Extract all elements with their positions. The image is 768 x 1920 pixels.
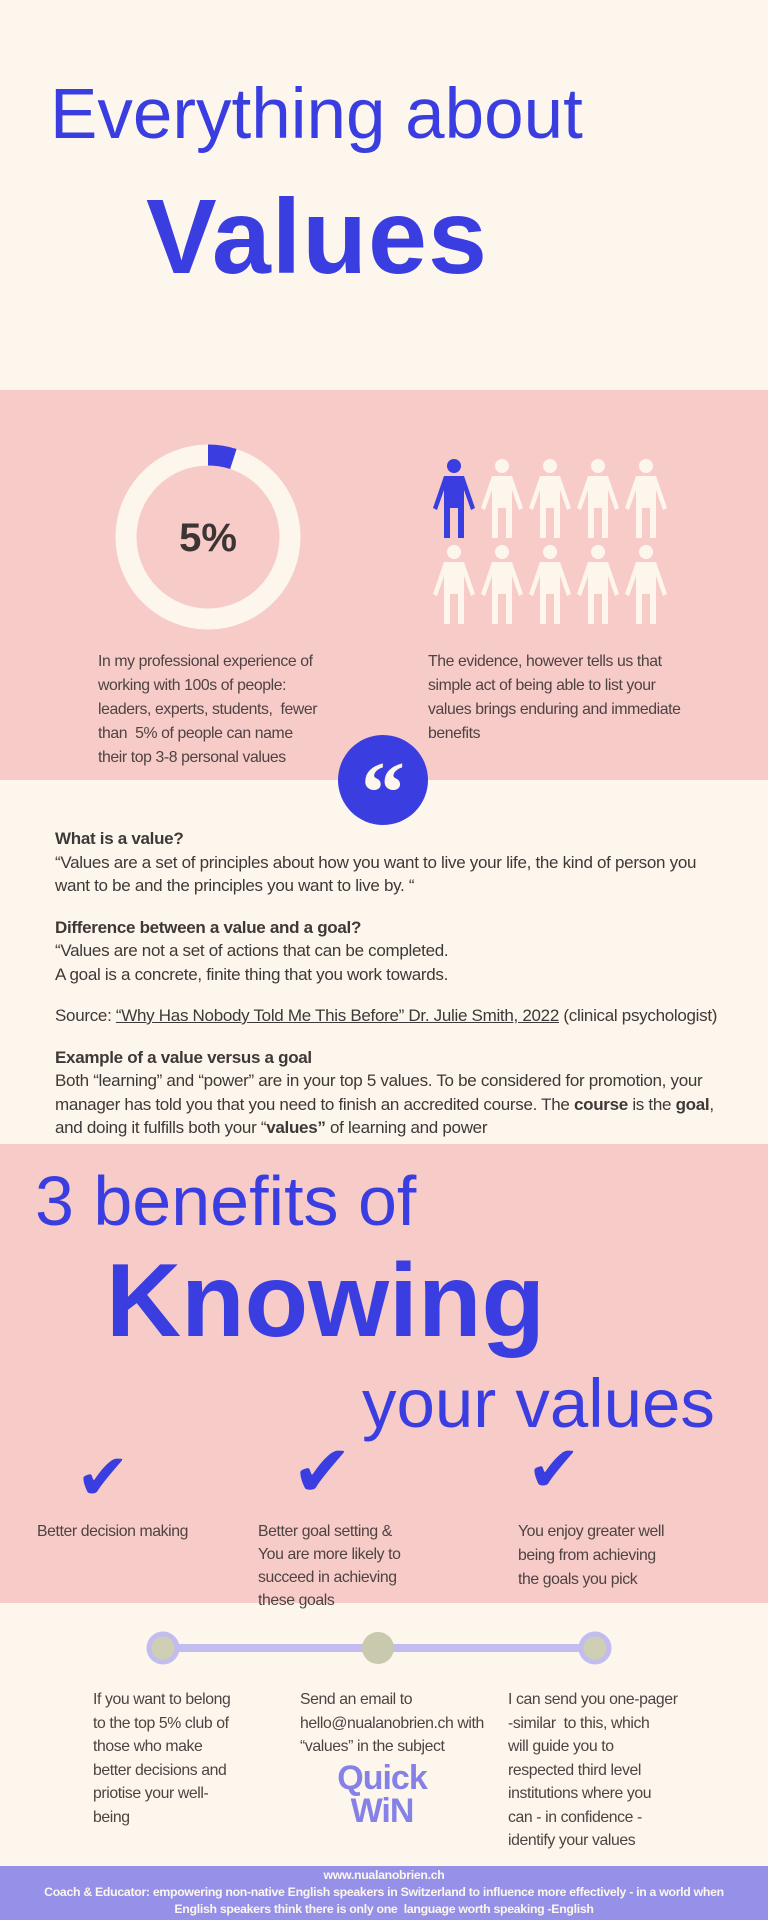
text: step 3: I can send you one-pager	[508, 1691, 678, 1708]
text: benefit 2: Better goal setting &	[258, 1523, 392, 1540]
text: evidence: simple act of being able to list your	[428, 677, 656, 694]
text: step 3: will guide you to	[508, 1738, 614, 1755]
text: step 3: identify your values	[508, 1832, 635, 1849]
text: benefit 2: succeed in achieving	[258, 1569, 397, 1586]
footer	[0, 1866, 768, 1920]
text block: definitions: “Values are a set of principles about how you want to live your life, the kind of person you	[55, 852, 696, 872]
text block: definitions: manager has told you that you need to finish an accredited course. The course is the goal,	[55, 1094, 714, 1114]
text block: definitions: Both “learning” and “power” are in your top 5 values. To be considered for promotion, your	[55, 1071, 702, 1090]
text: benefit 3	[518, 1523, 664, 1588]
text: step 3	[508, 1691, 678, 1849]
text block: definitions: What is a value?	[55, 829, 183, 848]
icon: check 1: ✔	[76, 1441, 130, 1513]
text: benefit 2: You are more likely to	[258, 1546, 401, 1563]
heading: 3 benefits of: 3 benefits of	[35, 1162, 416, 1240]
text: benefit 2: these goals	[258, 1592, 334, 1609]
text: experience: leaders, experts, students, fewer	[98, 701, 317, 718]
text: benefit 1: Better decision making	[37, 1523, 188, 1540]
icon: check 2: ✔	[292, 1432, 352, 1512]
text: step 1: those who make	[93, 1738, 202, 1755]
text block: definitions: Example of a value versus a goal	[55, 1048, 312, 1066]
text block: definitions: want to be and the principles you want to live by. “	[55, 876, 414, 895]
donut chart: 5%	[179, 516, 237, 560]
panel: statistics	[0, 390, 768, 780]
donut chart	[116, 444, 300, 630]
text: step 1: better decisions and	[93, 1762, 226, 1778]
text: step 3: respected third level	[508, 1762, 641, 1778]
text block: definitions	[55, 829, 717, 1137]
icon: quick win: Quick	[337, 1759, 427, 1797]
text: evidence: benefits	[428, 725, 480, 742]
text: evidence	[428, 653, 681, 742]
text: experience: In my professional experience of	[98, 653, 313, 670]
text: benefit 3: You enjoy greater well	[518, 1523, 664, 1540]
icon: quick win	[337, 1759, 428, 1830]
text: step 1: to the top 5% club of	[93, 1714, 229, 1732]
text: step 1: being	[93, 1808, 130, 1826]
text: evidence: The evidence, however tells us that	[428, 653, 662, 670]
text: experience: their top 3-8 personal values	[98, 749, 286, 766]
icon: quote circle	[338, 735, 428, 825]
text: experience	[98, 653, 318, 766]
text: step 1: If you want to belong	[93, 1691, 230, 1708]
title	[50, 75, 583, 296]
heading: values: Values	[146, 178, 488, 296]
footer: Coach & Educator: empowering non-native English speakers in Switzerland to influence more effectively - in a world when	[44, 1885, 724, 1899]
text block: definitions: Source: “Why Has Nobody Told Me This Before” Dr. Julie Smith, 2022 (clinical psychologist)	[55, 1006, 717, 1025]
text block: definitions: A goal is a concrete, finite thing that you work towards.	[55, 964, 448, 984]
text: evidence: values brings enduring and immediate	[428, 701, 681, 718]
heading: everything about: Everything about	[50, 75, 583, 154]
text: experience: working with 100s of people:	[98, 677, 286, 694]
icon: quote circle: “	[361, 745, 405, 842]
text block: definitions: “Values are not a set of actions that can be completed.	[55, 941, 448, 960]
text: step 2	[300, 1691, 484, 1755]
heading: your values: your values	[362, 1365, 715, 1442]
panel: benefits	[0, 1144, 768, 1603]
text: benefit 3: being from achieving	[518, 1547, 656, 1564]
text block: definitions: Difference between a value and a goal?	[55, 918, 361, 936]
text: step 3: institutions where you	[508, 1785, 651, 1802]
timeline	[146, 1632, 612, 1664]
footer: English speakers think there is only one language worth speaking -English	[174, 1902, 594, 1916]
text block: definitions: and doing it fulfills both your “values” of learning and power	[55, 1118, 487, 1137]
text: benefit 3: the goals you pick	[518, 1571, 637, 1588]
icon: check 3: ✔	[527, 1433, 581, 1505]
text: step 1	[93, 1691, 230, 1826]
footer: www.nualanobrien.ch	[324, 1868, 444, 1882]
heading: knowing: Knowing	[106, 1243, 545, 1359]
text: step 2: Send an email to	[300, 1691, 412, 1708]
text: step 1: priotise your well-	[93, 1785, 208, 1802]
text: benefit 2	[258, 1523, 401, 1609]
text: step 3: can - in confidence -	[508, 1808, 642, 1826]
text: experience: than 5% of people can name	[98, 725, 293, 742]
text: step 2: “values” in the subject	[300, 1738, 444, 1755]
icon: quick win: WiN	[351, 1792, 413, 1830]
text: step 3: -similar to this, which	[508, 1714, 649, 1732]
text: step 2: hello@nualanobrien.ch with	[300, 1714, 484, 1732]
icon: people grid	[433, 459, 667, 624]
